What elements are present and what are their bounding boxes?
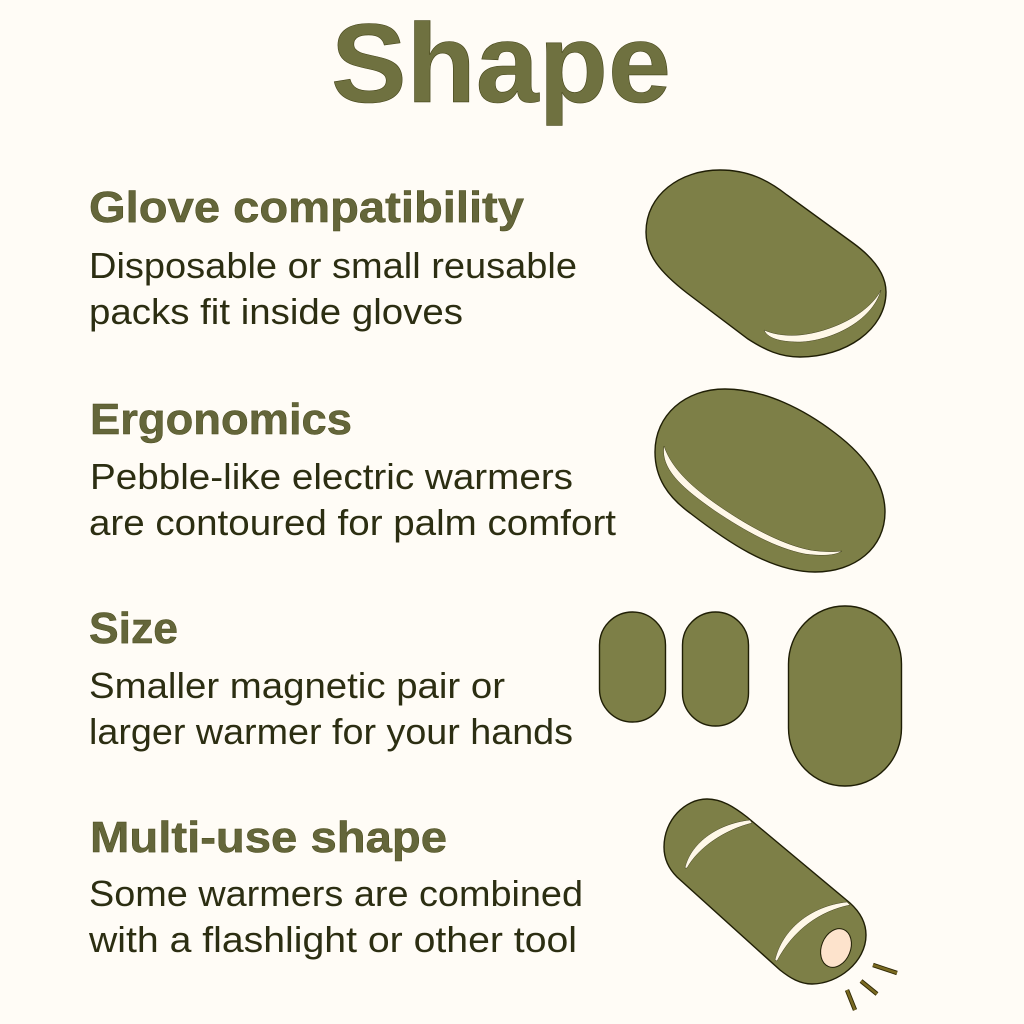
heading: size: Size xyxy=(89,604,178,653)
heading: multi-use shape: Multi-use shape xyxy=(90,813,447,862)
icon: small magnetic pair xyxy=(600,612,748,726)
text block: glove compatibility: Disposable or small reusable xyxy=(89,245,577,286)
text block: glove compatibility: packs fit inside gloves xyxy=(89,291,463,332)
title: Shape xyxy=(331,1,671,126)
icon: flashlight lens xyxy=(815,924,857,972)
heading: glove compatibility: Glove compatibility xyxy=(89,183,525,232)
icon: flashlight warmer xyxy=(664,799,897,1010)
panel: ergonomics xyxy=(89,389,885,572)
text block: ergonomics: are contoured for palm comfort xyxy=(89,502,616,543)
icon: pebble warmer xyxy=(655,389,885,572)
icon: rounded glove pack xyxy=(646,170,886,357)
text block: glove compatibility xyxy=(89,245,577,332)
text block: size xyxy=(89,665,573,752)
text block: ergonomics xyxy=(89,456,616,543)
text block: multi-use shape: with a flashlight or other tool xyxy=(88,919,577,960)
heading: ergonomics: Ergonomics xyxy=(90,395,352,444)
icon: light rays xyxy=(847,965,897,1010)
text block: multi-use shape: Some warmers are combined xyxy=(89,873,583,914)
panel: glove compatibility xyxy=(89,170,886,357)
text block: size: larger warmer for your hands xyxy=(89,711,573,752)
text block: size: Smaller magnetic pair or xyxy=(89,665,505,706)
panel: size xyxy=(89,604,902,786)
icon: large warmer xyxy=(788,606,902,786)
panel: multi-use shape xyxy=(88,799,897,1010)
text block: multi-use shape xyxy=(88,873,583,960)
text block: ergonomics: Pebble-like electric warmers xyxy=(90,456,573,497)
